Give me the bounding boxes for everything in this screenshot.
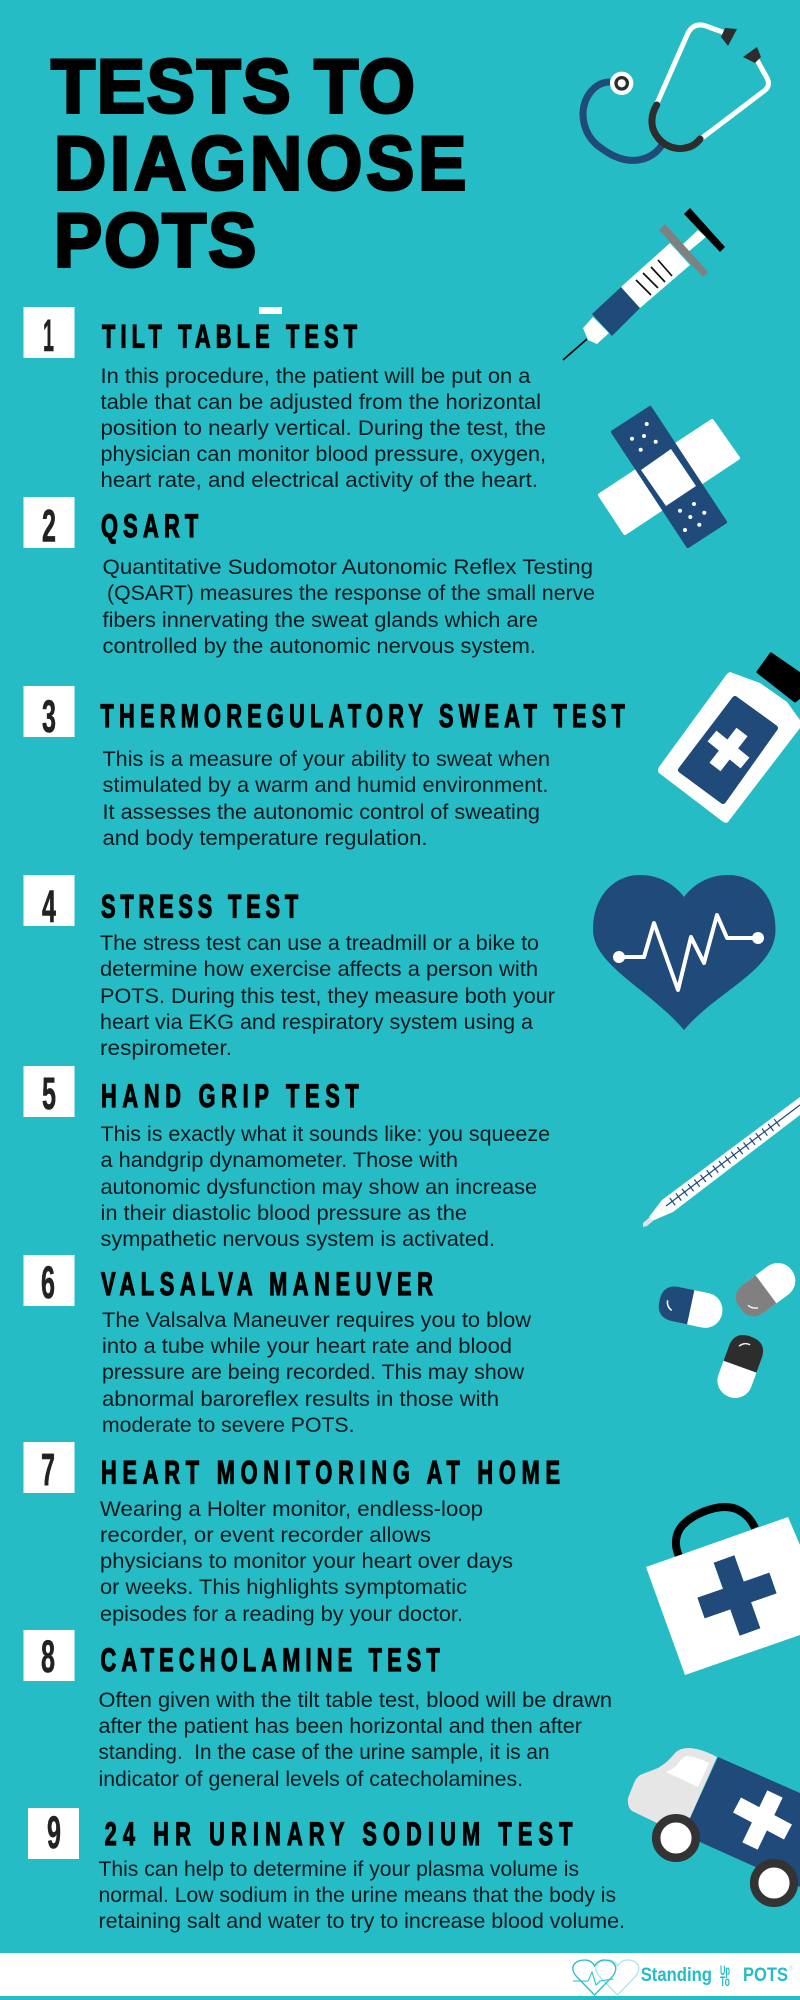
- body text: The Valsalva Maneuver requires you to blow: [102, 1309, 532, 1332]
- logo: Standing Up To POTS: Up: [720, 1962, 730, 1978]
- number badge 1: 1: [43, 310, 54, 361]
- body text: [100, 1498, 513, 1626]
- logo: Standing Up To POTS: Standing: [641, 1965, 712, 1986]
- body text: indicator of general levels of catecholamines.: [98, 1768, 523, 1791]
- heading: QSART: [101, 508, 198, 544]
- body text: [102, 1309, 532, 1437]
- body text: sympathetic nervous system is activated.: [100, 1228, 495, 1251]
- body text: heart via EKG and respiratory system using a: [100, 1011, 533, 1034]
- icon: heart with ECG line: [593, 875, 776, 1030]
- body text: Quantitative Sudomotor Autonomic Reflex Testing: [102, 556, 593, 579]
- body text: (QSART) measures the response of the small nerve: [107, 582, 595, 605]
- body text: recorder, or event recorder allows: [100, 1524, 431, 1547]
- body text: controlled by the autonomic nervous system.: [102, 635, 536, 658]
- section 3: thermoregulatory sweat test: [24, 686, 625, 850]
- body text: into a tube while your heart rate and blood: [102, 1335, 512, 1358]
- body text: pressure are being recorded. This may show: [102, 1361, 525, 1384]
- icon: bandage: [600, 408, 738, 546]
- body text: Often given with the tilt table test, blood will be drawn: [98, 1689, 612, 1712]
- number badge 2: 2: [42, 500, 56, 552]
- number badge 8: [24, 1630, 74, 1682]
- heading: STRESS TEST: [101, 888, 298, 925]
- icon: ambulance: [628, 1748, 800, 1903]
- body text: This is a measure of your ability to sweat when: [102, 748, 550, 771]
- section 5: hand grip test: [24, 1066, 550, 1251]
- number badge 6: 6: [41, 1257, 55, 1308]
- number badge 2: [24, 497, 74, 552]
- body text: episodes for a reading by your doctor.: [100, 1603, 463, 1626]
- body text: respirometer.: [100, 1037, 232, 1060]
- heading: HAND GRIP TEST: [101, 1078, 359, 1114]
- number badge 9: 9: [47, 1807, 61, 1858]
- number badge 8: 8: [41, 1631, 55, 1682]
- body text: [102, 556, 595, 658]
- body text: [102, 748, 550, 850]
- body text: a handgrip dynamometer. Those with: [100, 1149, 458, 1172]
- logo: Standing Up To POTS: [573, 1960, 794, 1995]
- icon: stethoscope: [583, 25, 768, 160]
- section 2: QSART: [24, 497, 595, 658]
- body text: normal. Low sodium in the urine means that the body is: [98, 1884, 616, 1907]
- section 7: heart monitoring at home: [24, 1442, 560, 1626]
- body text: It assesses the autonomic control of sweating: [102, 801, 540, 824]
- body text: abnormal baroreflex results in those with: [102, 1388, 499, 1411]
- logo: Standing Up To POTS: POTS: [743, 1965, 788, 1986]
- body text: POTS. During this test, they measure both your: [100, 985, 555, 1008]
- heading: VALSALVA MANEUVER: [101, 1266, 433, 1302]
- heading: THERMOREGULATORY SWEAT TEST: [100, 698, 625, 734]
- body text: [98, 1858, 625, 1933]
- number badge 4: [24, 875, 74, 932]
- number badge 6: [24, 1255, 74, 1308]
- title: DIAGNOSE: [54, 121, 466, 206]
- logo: Standing Up To POTS: To: [720, 1973, 730, 1989]
- footer band: [0, 1953, 800, 1996]
- icon: medicine bottle: [658, 654, 800, 823]
- body text: fibers innervating the sweat glands which are: [102, 609, 538, 632]
- section 9: 24 hr urinary sodium test: [28, 1807, 625, 1933]
- title: POTS: [54, 198, 256, 283]
- title: TESTS TO: [51, 44, 415, 129]
- body text: stimulated by a warm and humid environment.: [102, 774, 548, 797]
- body text: [100, 365, 546, 492]
- number badge 9: [28, 1807, 79, 1859]
- icon: pills: [656, 1256, 800, 1403]
- body text: and body temperature regulation.: [102, 827, 428, 850]
- body text: moderate to severe POTS.: [102, 1414, 354, 1437]
- body text: [100, 932, 555, 1060]
- section 6: valsalva maneuver: [24, 1255, 532, 1437]
- number badge 7: [24, 1442, 74, 1495]
- body text: [100, 1123, 550, 1251]
- heading: TILT TABLE TEST: [102, 318, 357, 354]
- body text: standing. In the case of the urine sample, it is an: [98, 1741, 550, 1764]
- body text: table that can be adjusted from the horizontal: [100, 391, 541, 414]
- section 4: stress test: [24, 875, 555, 1060]
- body text: [98, 1689, 612, 1791]
- icon: medical bag: [646, 1507, 800, 1675]
- body text: physicians to monitor your heart over days: [100, 1550, 513, 1573]
- heading: 24 HR URINARY SODIUM TEST: [105, 1816, 573, 1852]
- number badge 5: [24, 1066, 74, 1119]
- body text: position to nearly vertical. During the test, the: [100, 417, 546, 440]
- body text: after the patient has been horizontal and then after: [98, 1715, 582, 1738]
- body text: or weeks. This highlights symptomatic: [100, 1576, 467, 1599]
- section 1: tilt table test: [24, 307, 546, 492]
- number badge 4: 4: [42, 881, 56, 932]
- heading: CATECHOLAMINE TEST: [100, 1642, 440, 1678]
- number badge 3: [24, 686, 74, 742]
- body text: This is exactly what it sounds like: you squeeze: [100, 1123, 550, 1146]
- body text: This can help to determine if your plasma volume is: [98, 1858, 579, 1881]
- number badge 7: 7: [41, 1444, 55, 1495]
- body text: The stress test can use a treadmill or a bike to: [100, 932, 539, 955]
- body text: retaining salt and water to try to increase blood volume.: [98, 1910, 625, 1933]
- number badge 5: 5: [42, 1068, 56, 1119]
- heading: HEART MONITORING AT HOME: [101, 1454, 560, 1490]
- body text: physician can monitor blood pressure, oxygen,: [100, 443, 546, 466]
- body text: determine how exercise affects a person with: [100, 958, 538, 981]
- body text: in their diastolic blood pressure as the: [100, 1202, 467, 1225]
- body text: Wearing a Holter monitor, endless-loop: [100, 1498, 483, 1521]
- title: [51, 44, 466, 283]
- number badge 1: [24, 307, 74, 361]
- icon: thermometer: [643, 1097, 800, 1227]
- logo: Standing Up To POTS: ®: [789, 1965, 794, 1972]
- body text: heart rate, and electrical activity of the heart.: [100, 469, 538, 492]
- body text: autonomic dysfunction may show an increase: [100, 1176, 537, 1199]
- body text: In this procedure, the patient will be put on a: [100, 365, 531, 388]
- number badge 3: 3: [42, 691, 56, 742]
- icon: syringe: [563, 208, 725, 360]
- section 8: catecholamine test: [24, 1630, 612, 1791]
- white dash: [259, 307, 282, 314]
